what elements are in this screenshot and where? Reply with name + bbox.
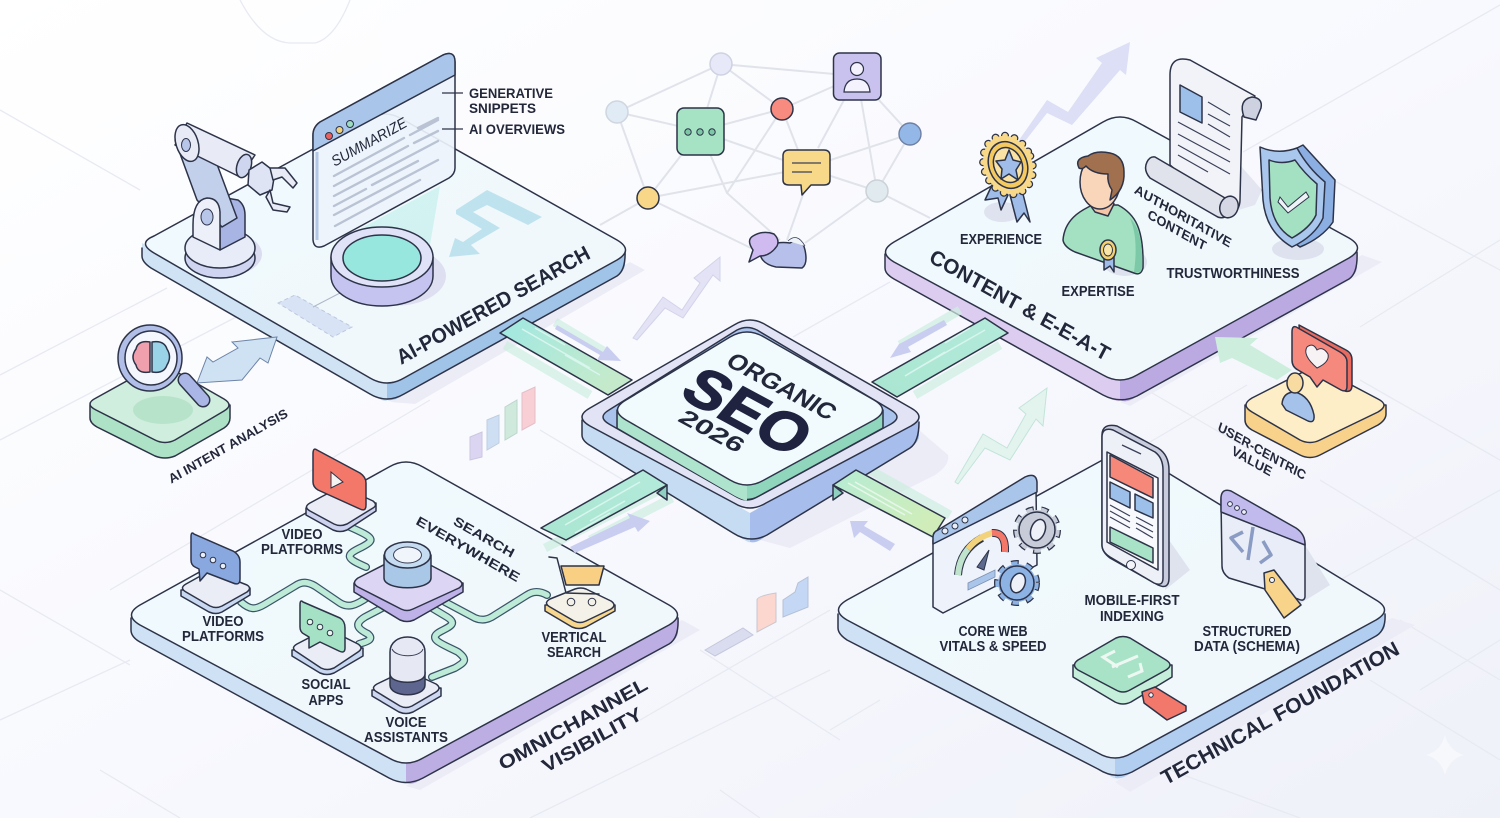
label: core web vitals: VITALS & SPEED bbox=[940, 639, 1046, 655]
arrow: to hub from omnichannel bbox=[570, 513, 650, 553]
connector: technical to hub bbox=[833, 470, 945, 537]
icon: green message square bbox=[677, 108, 724, 155]
icon: award medal bbox=[975, 128, 1041, 222]
panel: user-centric value bbox=[1215, 325, 1386, 483]
hub recess bbox=[603, 328, 897, 500]
network of nodes bbox=[600, 53, 930, 268]
yellow mini platform bbox=[1245, 368, 1386, 458]
platform slab bbox=[885, 117, 1358, 401]
bar chart: small bars bottom centre bbox=[705, 577, 808, 656]
callout: AI overviews: AI OVERVIEWS bbox=[469, 121, 565, 137]
zigzag arrow: lavender growth bbox=[633, 257, 720, 340]
icon: user square bbox=[834, 53, 881, 100]
arrow: lavender rising bbox=[1017, 42, 1130, 145]
title: organic: ORGANIC bbox=[721, 349, 842, 425]
tubes connecting channels bbox=[241, 527, 547, 677]
label: video platforms left: VIDEO bbox=[202, 614, 244, 630]
connector: omnichannel to hub bbox=[541, 470, 667, 540]
label: video platforms left: PLATFORMS bbox=[182, 629, 264, 645]
title: SEO: SEO bbox=[669, 356, 825, 468]
heading: VISIBILITY bbox=[539, 704, 646, 777]
callout: generative snippets: GENERATIVE bbox=[469, 85, 553, 101]
icon: shopping cart tile bbox=[545, 557, 615, 628]
hub outer slab bbox=[582, 320, 919, 542]
label: vertical search: SEARCH bbox=[547, 645, 601, 661]
label: user-centric value: USER-CENTRIC bbox=[1216, 419, 1308, 483]
icon: summarize browser window: SUMMARIZE bbox=[328, 114, 411, 170]
label: video platforms left bbox=[182, 614, 264, 645]
label: structured data: STRUCTURED bbox=[1202, 624, 1292, 640]
label: voice assistants: ASSISTANTS bbox=[364, 730, 448, 746]
label: search everywhere: EVERYWHERE bbox=[414, 513, 523, 585]
label: social apps: APPS bbox=[308, 693, 344, 709]
connectors to central hub from the top panels bbox=[500, 310, 1008, 548]
icon: summarize browser window bbox=[313, 54, 455, 247]
label: authoritative content: AUTHORITATIVE bbox=[1133, 181, 1233, 250]
zigzag arrow: green growth bbox=[955, 388, 1047, 484]
heading: TECHNICAL FOUNDATION bbox=[1157, 636, 1403, 790]
drop shadows under platforms bbox=[390, 255, 1415, 792]
label: search everywhere: SEARCH bbox=[451, 513, 517, 561]
label: vertical search bbox=[542, 630, 607, 661]
platform slab bbox=[131, 462, 678, 784]
icon: lens disc with projected light bbox=[331, 186, 446, 306]
label: expertise: EXPERTISE bbox=[1062, 284, 1135, 300]
label: mobile-first indexing: MOBILE-FIRST bbox=[1084, 593, 1180, 609]
node: pale lavender bbox=[710, 53, 732, 75]
heading: OMNICHANNEL bbox=[495, 674, 651, 775]
icon: red tag bbox=[1142, 687, 1186, 720]
icon: expert person bbox=[1063, 152, 1147, 276]
icon: speech bubble and cloud bbox=[749, 232, 806, 268]
panel: omnichannel visibility bbox=[131, 449, 678, 784]
icon: yellow chat bubble bbox=[783, 150, 830, 195]
icon: video platform tile top bbox=[306, 449, 376, 532]
label: AI intent analysis: AI INTENT ANALYSIS bbox=[166, 406, 290, 486]
node: yellow bbox=[637, 187, 659, 209]
icon: core web vitals window bbox=[933, 475, 1037, 613]
panel: technical foundation base bbox=[838, 452, 1385, 778]
panel: AI-powered search bbox=[142, 54, 626, 401]
callout lines bbox=[442, 93, 463, 129]
icon: magnifier with brain bbox=[118, 325, 203, 400]
icon: central database hub bbox=[354, 542, 463, 622]
icon: heart bubble bbox=[1292, 325, 1352, 391]
icon: sparkle watermark bbox=[1426, 735, 1464, 775]
connectors to central hub from the bottom panels bbox=[541, 470, 945, 553]
icon: robot arm bbox=[171, 122, 297, 278]
label: trustworthiness: TRUSTWORTHINESS bbox=[1166, 266, 1300, 282]
speedometer gauge bbox=[958, 533, 1005, 590]
label: social apps: SOCIAL bbox=[302, 677, 351, 693]
label: social apps bbox=[302, 677, 351, 709]
label: user-centric value: VALUE bbox=[1230, 442, 1274, 479]
icon: social tile bbox=[292, 601, 363, 674]
heading: CONTENT & E-E-A-T bbox=[926, 245, 1115, 366]
arrow: to hub from technical bbox=[850, 521, 895, 551]
node: pale blue bbox=[606, 101, 628, 123]
label: core web vitals: CORE WEB bbox=[958, 624, 1028, 640]
icon: code window bbox=[1221, 490, 1330, 610]
callout: generative snippets: SNIPPETS bbox=[469, 100, 536, 116]
arrow: double headed bbox=[197, 337, 277, 383]
connector glows bbox=[505, 310, 1000, 548]
label: authoritative content: CONTENT bbox=[1146, 206, 1209, 254]
label: video platforms top: VIDEO bbox=[282, 527, 322, 543]
label: structured data: DATA (SCHEMA) bbox=[1194, 639, 1300, 655]
label: vertical search: VERTICAL bbox=[542, 630, 607, 646]
panel: AI intent analysis bbox=[90, 325, 290, 486]
bar chart: small bars left bbox=[470, 387, 535, 460]
connector: content to hub bbox=[872, 318, 1008, 397]
icon: yellow tag bbox=[1264, 570, 1301, 618]
icon: voice assistant tile bbox=[372, 637, 441, 714]
node: coral bbox=[771, 98, 793, 120]
dashed placeholder block bbox=[278, 293, 352, 337]
arrow: to hub from AI search bbox=[555, 325, 621, 361]
arrow: to hub from content bbox=[890, 320, 947, 358]
label: mobile-first indexing bbox=[1084, 593, 1180, 625]
connector: AI search to hub bbox=[500, 318, 632, 395]
heading: AI-POWERED SEARCH bbox=[392, 241, 594, 369]
label: mobile-first indexing: INDEXING bbox=[1100, 609, 1164, 625]
panel: content and E-E-A-T bbox=[885, 42, 1358, 401]
panel: technical foundation icons bbox=[933, 425, 1403, 790]
title: 2026: 2026 bbox=[673, 406, 750, 458]
label: voice assistants: VOICE bbox=[386, 715, 427, 731]
node: blue bbox=[899, 123, 921, 145]
arrow: green into platform bbox=[1215, 337, 1292, 380]
hub top plate bbox=[617, 332, 883, 500]
green mini platform bbox=[90, 365, 230, 458]
icon: smartphone bbox=[1102, 425, 1190, 590]
label: voice assistants bbox=[364, 715, 448, 746]
label: structured data bbox=[1194, 624, 1300, 655]
icon: document scroll bbox=[1146, 59, 1262, 220]
label: experience: EXPERIENCE bbox=[960, 232, 1042, 248]
central hub: Organic SEO 2026 bbox=[582, 320, 919, 542]
label: video platforms top: PLATFORMS bbox=[261, 542, 343, 558]
platform slab bbox=[142, 114, 626, 401]
node: grey green bbox=[866, 180, 888, 202]
label: core web vitals bbox=[940, 624, 1046, 655]
icon: blue gear bbox=[998, 564, 1036, 602]
label: video platforms top bbox=[261, 527, 343, 558]
icon: green code block bbox=[1073, 636, 1172, 704]
icon: chat tile left bbox=[181, 533, 250, 614]
icon: grey gear bbox=[1017, 510, 1057, 550]
icon: squiggle arrow bbox=[449, 190, 542, 257]
icon: shield with check bbox=[1260, 145, 1335, 260]
icon: user figure bbox=[1282, 373, 1314, 422]
